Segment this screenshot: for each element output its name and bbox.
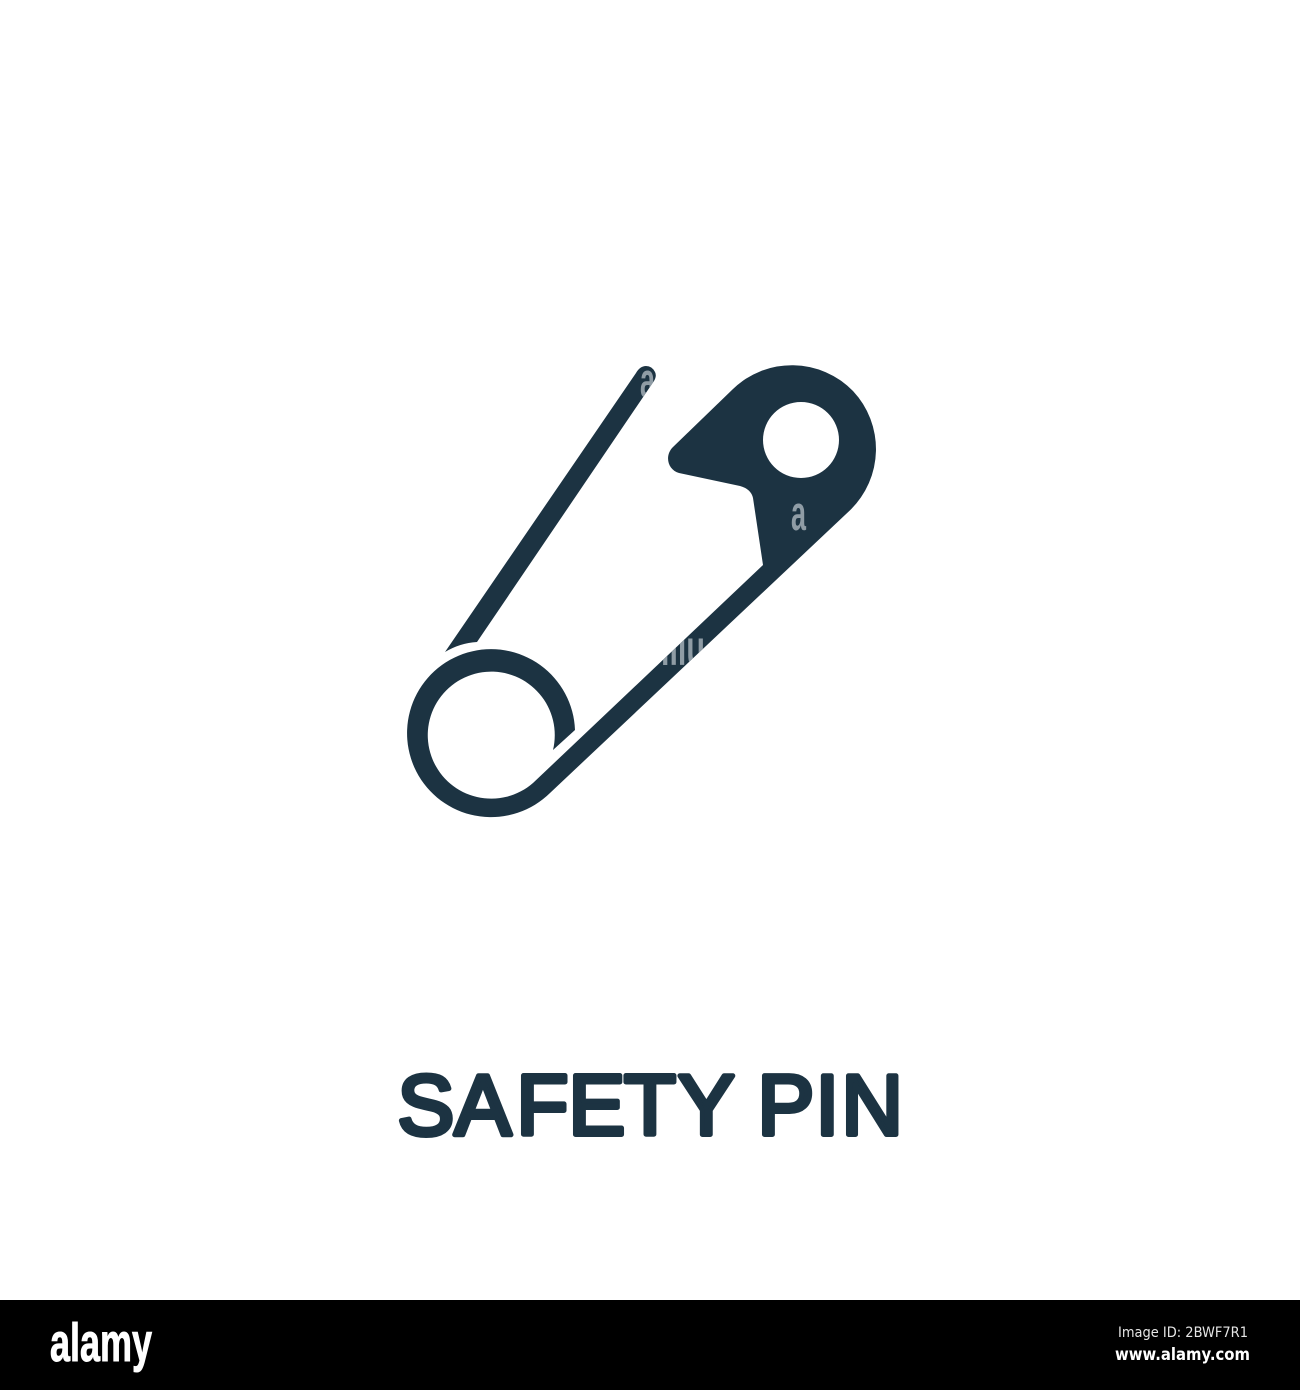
pin head, bar and coil (407, 365, 876, 817)
footer logo: alamy (50, 1313, 152, 1373)
watermark fragments on the pin: a (640, 354, 655, 408)
website: www.alamy.com (1115, 1345, 1250, 1365)
icon: safety pin (407, 365, 876, 817)
watermark fragments on the pin (640, 354, 806, 676)
watermark fragments on the pin: illu (661, 620, 705, 676)
image id: Image ID: 2BWF7R1 (1118, 1325, 1248, 1341)
title: SAFETY PIN (398, 1058, 903, 1154)
watermark fragments on the pin: a (791, 487, 806, 541)
footer bar (0, 1300, 1300, 1390)
pin needle arm (445, 366, 656, 652)
